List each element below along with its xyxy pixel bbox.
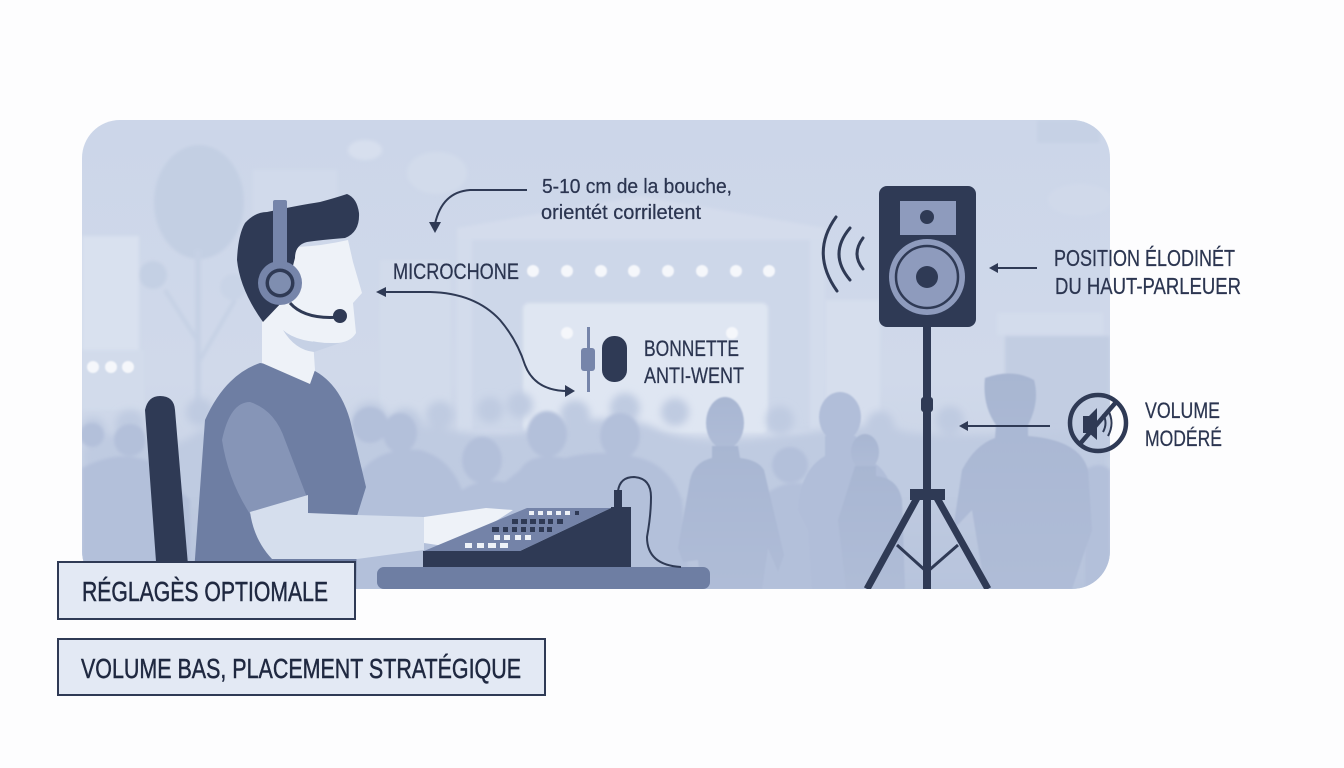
label: moderate volume: VOLUME — [1145, 398, 1220, 423]
sound waves — [823, 217, 863, 291]
label: windscreen: ANTI-WENT — [644, 363, 744, 388]
background: stage — [523, 303, 768, 434]
tweeter — [900, 201, 956, 235]
headset band — [273, 200, 287, 262]
label: speaker position: POSITION ÉLODINÉT — [1054, 245, 1235, 271]
label: speaker position — [1054, 245, 1241, 299]
neck — [262, 318, 315, 384]
background: trees and buildings — [82, 120, 1112, 456]
crowd: middle layer — [80, 407, 1110, 589]
label: distance from mouth: 5-10 cm de la bouche, — [542, 176, 732, 198]
icon: windscreen foam — [581, 327, 627, 392]
label: microphone: MICROCHONE — [393, 259, 519, 284]
arrow: to microphone position — [429, 190, 527, 233]
label: distance from mouth — [541, 176, 732, 224]
chair — [145, 396, 188, 561]
hair — [237, 194, 359, 322]
arrow: microphone to windscreen — [376, 287, 575, 397]
jaw shadow — [283, 330, 340, 352]
torso — [192, 363, 366, 600]
label: moderate volume: MODÉRÉ — [1145, 426, 1222, 451]
sleeve highlight — [222, 402, 308, 514]
person: child front — [855, 434, 904, 588]
headset microphone — [290, 303, 347, 323]
headset ear cup — [258, 261, 302, 305]
arrow: to audience — [959, 421, 1050, 431]
arm — [250, 495, 424, 559]
label: windscreen — [644, 336, 744, 388]
speaker cabinet — [879, 186, 976, 327]
subtitle box: VOLUME BAS, PLACEMENT STRATÉGIQUE — [81, 653, 521, 684]
tripod — [867, 327, 988, 589]
face — [262, 240, 362, 343]
crowd: foreground people — [678, 373, 1092, 589]
title box — [58, 562, 355, 619]
string lights — [87, 265, 775, 373]
title box: RÉGLAGÈS OPTIOMALE — [82, 576, 328, 607]
panel: festival scene — [80, 120, 1112, 600]
arrow: to speaker — [989, 263, 1037, 273]
audio mixer — [423, 477, 681, 567]
infographic scene — [57, 120, 1240, 696]
woofer — [889, 239, 965, 315]
person: centre back — [804, 392, 887, 558]
person: right foreground — [953, 373, 1092, 589]
label: windscreen: BONNETTE — [644, 336, 739, 361]
label: speaker position: DU HAUT-PARLEUER — [1055, 273, 1241, 299]
hand — [424, 508, 513, 549]
man with headset — [192, 194, 513, 600]
crowd: far layer — [80, 392, 1110, 600]
label: distance from mouth: orientét corriletent — [541, 202, 701, 224]
loudspeaker on tripod — [823, 186, 988, 589]
icon: muted speaker — [1070, 395, 1126, 451]
person: centre left — [683, 396, 769, 584]
label: moderate volume — [1145, 398, 1222, 451]
table — [377, 567, 710, 589]
subtitle box — [58, 639, 545, 695]
